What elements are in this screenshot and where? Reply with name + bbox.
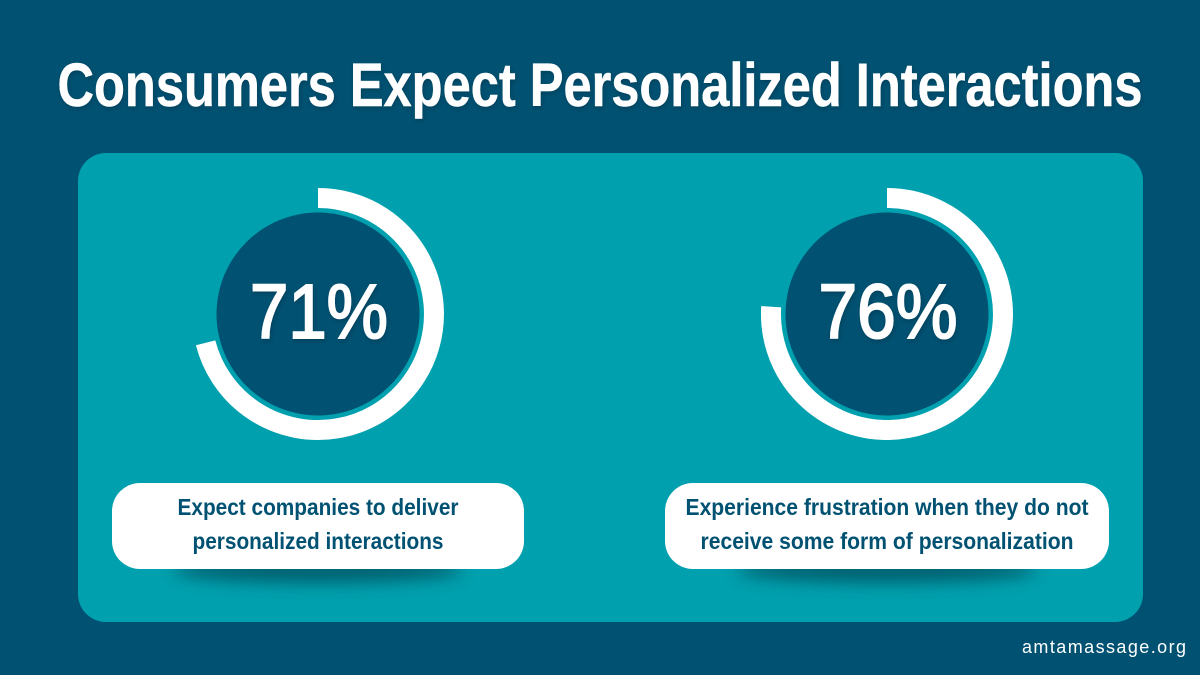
stat: 76% donut: 76% [818,269,958,355]
callout: expect companies: personalized interactions [192,528,444,554]
callout: experience frustration: Experience frustration when they do not [686,494,1089,520]
stat: 71% donut [206,198,434,430]
callout: experience frustration [665,483,1109,583]
stat: 71% donut: 71% [250,269,388,355]
source url: amtamassage.org [1022,637,1186,657]
callout: expect companies [112,483,524,583]
panel: statistics [78,153,1143,622]
callout: experience frustration: receive some form of personalization [700,528,1074,554]
callout: expect companies: Expect companies to deliver [178,494,459,520]
stat: 76% donut [771,198,1003,430]
